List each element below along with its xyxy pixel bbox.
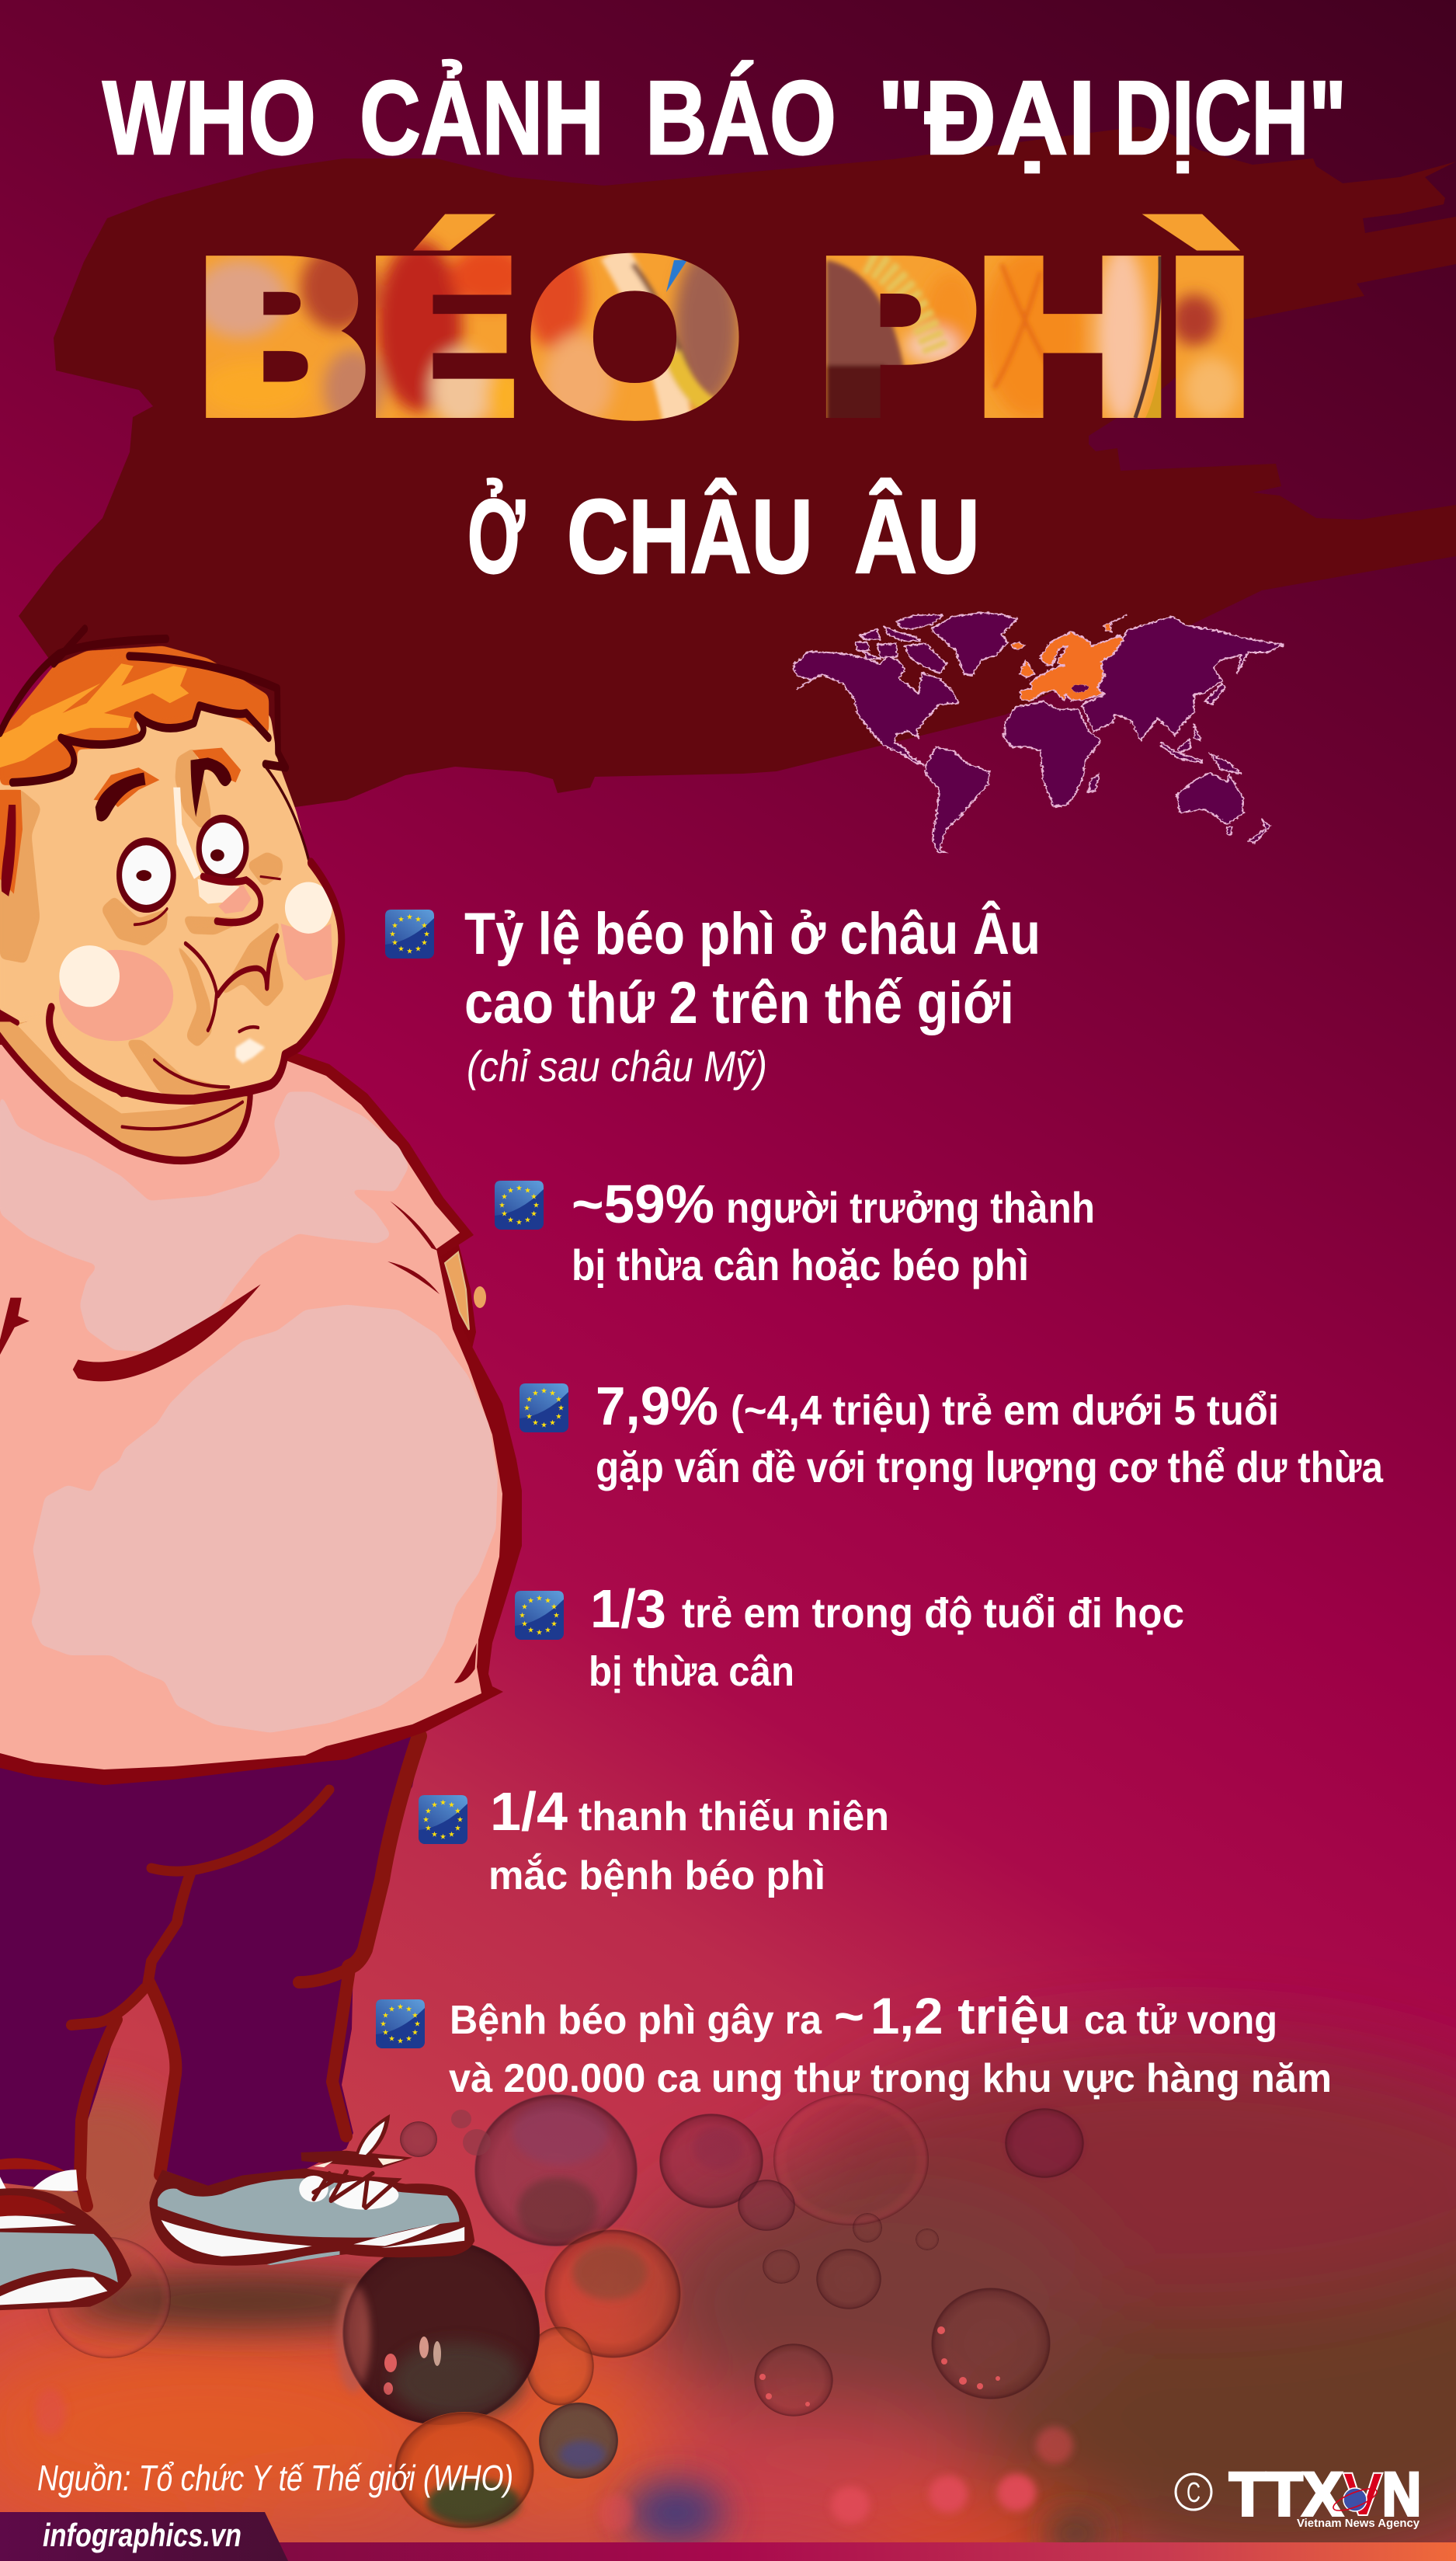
wordmark: N bbox=[1382, 2459, 1421, 2528]
icon: EU flag bbox=[520, 1383, 568, 1432]
bullet text: ~ bbox=[834, 1988, 864, 2044]
title line 1: BÁO bbox=[645, 59, 836, 176]
background: blurred bokeh photo bbox=[0, 2043, 1456, 2561]
hair strand by ear bbox=[2, 805, 16, 896]
shoelace bow bbox=[299, 2114, 412, 2210]
title: BÉO PHÌ with photo fill: É bbox=[359, 217, 526, 463]
bullet: deaths and cancers bbox=[376, 1987, 1332, 2101]
left shoe bbox=[0, 2158, 132, 2310]
title line 1: "ĐẠI bbox=[877, 59, 1096, 176]
neck band bbox=[17, 1013, 242, 1113]
copyright mark: C bbox=[1187, 2476, 1201, 2508]
head and upper shirt bbox=[0, 629, 440, 1381]
bullet text bbox=[488, 1781, 889, 1898]
icon: EU flag bbox=[495, 1181, 544, 1230]
bubble: orange green low bbox=[394, 2412, 534, 2528]
right shoe bbox=[151, 2170, 473, 2265]
bullet: 59 percent adults bbox=[495, 1174, 1095, 1289]
bubble: dark red bbox=[1005, 2108, 1084, 2178]
bullet text: và 200.000 ca ung thư trong khu vực hàng năm bbox=[449, 2056, 1332, 2101]
neck fold lines bbox=[0, 1013, 242, 1129]
title line 1: DỊCH" bbox=[1114, 59, 1347, 176]
website tab bbox=[0, 2512, 288, 2561]
cheeks bbox=[59, 882, 333, 1041]
bubble: ring mid bbox=[754, 2344, 833, 2417]
bottom strip bbox=[0, 2542, 1456, 2561]
face shadows bbox=[0, 748, 284, 1097]
wordmark: TTX bbox=[1229, 2459, 1343, 2528]
bullet text: 1/4 bbox=[490, 1781, 568, 1842]
shoes bbox=[0, 2114, 473, 2310]
bullet text: Tỷ lệ béo phì ở châu Âu bbox=[464, 900, 1041, 967]
title: BÉO PHÌ with photo fill bbox=[189, 217, 1264, 463]
bullet: 7.9 percent children bbox=[520, 1376, 1384, 1491]
hand bbox=[439, 1243, 486, 1352]
bubble: small orange bbox=[526, 2326, 594, 2406]
Europe highlighted bbox=[1010, 615, 1127, 701]
bullet text: 7,9% bbox=[596, 1376, 718, 1436]
wordmark bbox=[1229, 2459, 1421, 2528]
title line 3: CHÂU bbox=[567, 478, 813, 595]
agency name: Vietnam News Agency bbox=[1297, 2517, 1420, 2530]
copyright mark bbox=[1176, 2474, 1211, 2510]
bullet text: ~59% bbox=[572, 1174, 714, 1234]
title: BÉO PHÌ with photo fill: H bbox=[967, 218, 1179, 463]
wordmark: V bbox=[1343, 2459, 1383, 2528]
bubbles photo bbox=[35, 2093, 1084, 2531]
shirt belly highlight bbox=[31, 1305, 498, 1732]
head skin bbox=[0, 666, 342, 1101]
hair bbox=[0, 646, 269, 785]
bubble: green blue bbox=[539, 2403, 618, 2479]
title line 1: WHO bbox=[103, 59, 316, 176]
icon: EU flag bbox=[419, 1795, 467, 1844]
title line 1 bbox=[103, 59, 1347, 176]
hair outlines bbox=[0, 629, 286, 782]
eye right bbox=[199, 819, 246, 878]
bullet text: cao thứ 2 trên thế giới bbox=[464, 970, 1014, 1036]
trousers bbox=[0, 1732, 423, 2192]
trouser outlines bbox=[71, 1736, 419, 2206]
bubble: ring right bbox=[931, 2288, 1051, 2399]
bullet text bbox=[596, 1376, 1384, 1491]
website tab: infographics.vn bbox=[43, 2517, 242, 2553]
bubble: medium purple bbox=[659, 2114, 763, 2208]
mouth and chin bbox=[155, 936, 277, 1087]
icon: EU flag bbox=[385, 910, 434, 959]
bullet text: trẻ em trong độ tuổi đi học bbox=[682, 1590, 1184, 1637]
bokeh pink dots bbox=[35, 2389, 1073, 2531]
bullet: one quarter adolescents bbox=[419, 1781, 889, 1898]
bullet text: thanh thiếu niên bbox=[579, 1794, 889, 1839]
bullet text: mắc bệnh béo phì bbox=[488, 1853, 825, 1898]
bubble: large purple bbox=[474, 2094, 638, 2246]
bullet text: bị thừa cân hoặc béo phì bbox=[572, 1240, 1029, 1289]
title: BÉO PHÌ with photo fill: B bbox=[189, 218, 377, 463]
bullet text: bị thừa cân bbox=[589, 1648, 794, 1695]
bullet text: ca tử vong bbox=[1084, 1998, 1277, 2043]
bullet text: (chỉ sau châu Mỹ) bbox=[467, 1042, 767, 1091]
character: fat boy bbox=[0, 629, 522, 2310]
bullet: one third school children bbox=[515, 1578, 1184, 1695]
title line 3: Ở bbox=[467, 478, 525, 595]
eye left bbox=[120, 841, 173, 909]
title line 3: ÂU bbox=[854, 478, 980, 595]
eyebrow right bbox=[191, 748, 241, 817]
collar bbox=[0, 1018, 250, 1160]
nose and under-eye lines bbox=[134, 876, 280, 924]
bullet text: Bệnh béo phì gây ra bbox=[450, 1998, 822, 2043]
bullet text: 1,2 triệu bbox=[870, 1987, 1071, 2044]
bullet: obesity rate in Europe bbox=[385, 900, 1041, 1091]
head outline bbox=[50, 766, 342, 1100]
world map bbox=[794, 612, 1283, 853]
title: BÉO PHÌ with photo fill: Ì bbox=[1155, 217, 1264, 463]
icon: EU flag bbox=[376, 1999, 425, 2048]
shirt outline bbox=[0, 1029, 522, 1785]
hair highlight bbox=[0, 663, 189, 767]
icon: EU flag bbox=[515, 1591, 564, 1640]
bullet text: 1/3 bbox=[590, 1578, 666, 1639]
globe bbox=[1331, 2484, 1379, 2515]
bubble: small purple bbox=[738, 2180, 795, 2231]
bullet text: (~4,4 triệu) trẻ em dưới 5 tuổi bbox=[731, 1387, 1279, 1434]
source: Nguồn: Tổ chức Y tế Thế giới (WHO) bbox=[37, 2458, 513, 2498]
bullet text bbox=[589, 1578, 1184, 1695]
bubble: behind left shoe bbox=[47, 2237, 171, 2358]
bullet text: người trưởng thành bbox=[726, 1183, 1095, 1232]
bullet text bbox=[572, 1174, 1095, 1289]
shirt shoulder highlight bbox=[0, 1092, 409, 1352]
title line 1: CẢNH bbox=[360, 59, 604, 176]
bubble: large faint bbox=[773, 2093, 929, 2225]
title: BÉO PHÌ with photo fill: O bbox=[523, 218, 746, 463]
shirt fill bbox=[0, 1045, 502, 1769]
bullet text bbox=[449, 1987, 1332, 2101]
eyebrow left bbox=[94, 767, 159, 821]
bubble: large dark bbox=[336, 2240, 540, 2425]
shirt fold lines bbox=[0, 1201, 440, 1381]
brush stroke backdrop bbox=[19, 127, 1456, 816]
bubble: orange bbox=[544, 2229, 681, 2358]
nose highlights bbox=[173, 788, 252, 913]
bullet text bbox=[464, 900, 1041, 1091]
continents bbox=[794, 612, 1283, 853]
title line 3 bbox=[467, 478, 980, 595]
bubble group: small bbox=[400, 2110, 939, 2309]
logo: TTXVN bbox=[1176, 2459, 1421, 2530]
title: BÉO PHÌ with photo fill: P bbox=[810, 218, 981, 463]
